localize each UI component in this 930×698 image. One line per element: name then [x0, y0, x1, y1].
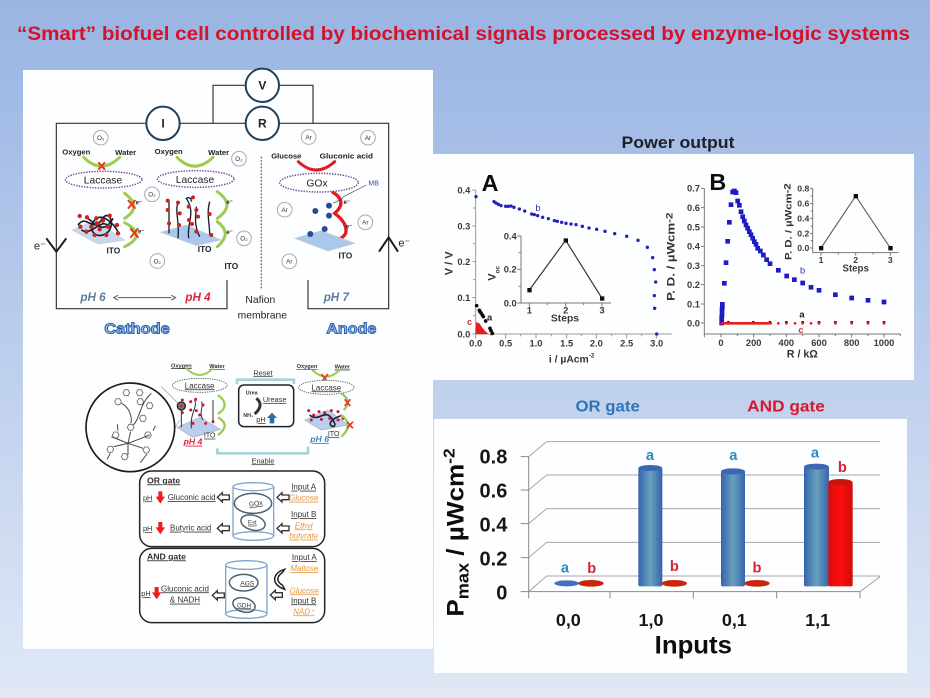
- magnified molecule: [86, 383, 180, 472]
- pH labels: pH 7: [323, 291, 349, 304]
- upper Laccase ellipses: Laccase: [185, 381, 215, 390]
- electron labels: e⁻: [344, 200, 350, 206]
- bars at inputs 0,0: [554, 580, 604, 587]
- urease box: pH: [256, 415, 266, 424]
- GOx enzyme: GOx: [249, 500, 264, 509]
- chart A x tick labels: 1.5: [560, 339, 573, 349]
- OR gate row 2: Butyric acid: [170, 524, 211, 533]
- AND gate output: [141, 584, 282, 605]
- y axis tick labels: 0.8: [480, 447, 507, 469]
- inset: open-circuit voltage: 0.2: [504, 265, 517, 275]
- upper reaction labels: Water: [209, 364, 226, 370]
- left electron arrow: e⁻: [34, 240, 46, 252]
- pH labels: pH 4: [184, 291, 211, 304]
- electrode labels: pH 6: [309, 434, 329, 444]
- series labels: c: [798, 325, 804, 335]
- ITO labels: ITO: [198, 244, 212, 254]
- chart A y tick labels: [457, 185, 471, 339]
- ITO labels: ITO: [338, 251, 353, 261]
- substrate labels: Water: [208, 148, 229, 157]
- electrode surfaces: [72, 221, 355, 251]
- upper Laccase ellipses: [172, 378, 354, 394]
- upper reaction labels: [171, 363, 351, 371]
- right electron arrow: e⁻: [398, 238, 410, 250]
- inhibited reaction crosses: [98, 162, 138, 238]
- chart B letter: B: [709, 169, 726, 195]
- Enable bracket: Enable: [252, 456, 274, 465]
- chart B: power density vs resistance: [664, 169, 901, 361]
- inset: power density: 0.0: [797, 243, 810, 253]
- meter I: [146, 107, 180, 140]
- electrode labels: [183, 431, 340, 447]
- upper reaction labels: Oxygen: [297, 364, 318, 370]
- y axis tick labels: [480, 447, 507, 604]
- blocked reaction cross: [321, 374, 328, 382]
- inset: open-circuit voltage: V: [487, 273, 499, 281]
- bars at inputs 1,0: [638, 465, 687, 587]
- electrode labels: ITO: [328, 431, 340, 438]
- chart A y tick labels: 0.1: [457, 293, 470, 303]
- chart B axis titles: R / kΩ: [787, 349, 818, 361]
- inset: power density: 0.4: [797, 213, 810, 223]
- chart A x tick labels: 0.0: [469, 339, 482, 349]
- GOx enzyme: [234, 493, 272, 513]
- enzyme names: [84, 175, 328, 189]
- upper Laccase ellipses: Laccase: [311, 383, 342, 392]
- Nafion membrane dotted line: [259, 157, 263, 290]
- AND gate output: pH: [141, 589, 151, 598]
- Reset bracket: Reset: [253, 368, 273, 377]
- x axis tick labels: 0,1: [722, 610, 747, 630]
- AND gate inputs: Maltose: [290, 564, 319, 573]
- meter I: I: [161, 117, 165, 131]
- y axis tick labels: 0.2: [480, 548, 507, 570]
- electron labels: e⁻: [138, 229, 144, 235]
- OR gate box: [140, 471, 325, 547]
- urease box: [239, 385, 294, 427]
- enzyme names: Laccase: [84, 176, 122, 187]
- argon bubbles: Ar: [282, 207, 288, 214]
- chart A y tick labels: 0.2: [457, 257, 470, 267]
- chart B y tick labels: 0.7: [687, 184, 700, 194]
- inset: open-circuit voltage: oc: [494, 265, 501, 273]
- chart B axis titles: [664, 212, 818, 361]
- MB label: MB: [368, 181, 379, 188]
- Enable bracket: [217, 447, 308, 465]
- chart B x tick labels: 800: [844, 338, 859, 348]
- AND gate inputs: Input B: [291, 596, 316, 605]
- chart A y tick labels: 0.0: [457, 329, 470, 339]
- x axis tick labels: 0,0: [556, 610, 581, 630]
- x axis tick labels: [556, 610, 830, 630]
- OR gate row 1: pH: [143, 493, 152, 502]
- extended polymer brush: [168, 197, 211, 238]
- chart B axis titles: P. D. / µWcm: [665, 238, 677, 301]
- chart B y tick labels: 0.6: [687, 203, 700, 213]
- ITO labels: ITO: [106, 246, 121, 256]
- urease box: NH₃: [243, 413, 254, 419]
- bar chart gridlines: [529, 442, 880, 592]
- inset: open-circuit voltage: 1: [527, 306, 532, 316]
- series a points: [477, 306, 492, 333]
- GDH enzyme: GDH: [237, 602, 251, 609]
- chart B axis titles: -2: [664, 212, 674, 223]
- oxygen bubbles: O₂: [154, 258, 162, 265]
- oxygen bubbles: [93, 130, 251, 268]
- Power output heading: Power output: [622, 133, 735, 152]
- bar letters a: a: [646, 448, 655, 464]
- oxygen bubbles: O₂: [97, 135, 105, 142]
- bar letters a: [561, 446, 820, 577]
- chart A axis titles: V / V: [443, 251, 455, 275]
- Est enzyme: [239, 512, 267, 533]
- chart A axis titles: i / µAcm: [549, 354, 589, 365]
- AGS enzyme: AGS: [240, 580, 255, 587]
- meter R: [246, 107, 279, 140]
- inset: power density: P. D. / µWcm: [784, 205, 794, 260]
- Est enzyme: Est: [248, 521, 257, 527]
- y axis title: max: [454, 562, 473, 599]
- logic gate schematics: [86, 363, 354, 623]
- x axis tick labels: 1,0: [638, 610, 664, 630]
- chart B x tick labels: 1000: [874, 338, 894, 348]
- series labels: a: [799, 310, 805, 320]
- inset: open-circuit voltage: 0.4: [504, 231, 517, 241]
- AND gate output: Gluconic acid: [161, 584, 209, 593]
- OR gate inputs: Ethyl: [295, 521, 313, 530]
- electrode labels: ITO: [204, 433, 216, 440]
- bar letters a: a: [811, 446, 820, 462]
- ITO labels: [106, 244, 353, 271]
- meter V: [246, 69, 279, 102]
- enzyme ellipses: [65, 171, 358, 192]
- MB label: [333, 181, 379, 203]
- maltose conversion arrow: [275, 569, 285, 589]
- electrode labels: pH 4: [183, 437, 203, 447]
- y axis title: -2: [442, 448, 459, 464]
- OR gate row 2: [143, 522, 289, 534]
- left electron arrow: [34, 238, 66, 252]
- series b points: [722, 191, 884, 323]
- AND gate heading: AND gate: [747, 399, 825, 416]
- chart A x tick labels: 0.5: [499, 339, 512, 349]
- y axis tick labels: 0: [496, 582, 507, 604]
- inset: power density: -2: [782, 183, 792, 193]
- x axis title: Inputs: [655, 631, 732, 659]
- OR gate inputs: Input B: [291, 510, 316, 519]
- argon bubbles: Ar: [365, 135, 371, 142]
- inset: power density: 3: [888, 255, 893, 265]
- series labels: [467, 203, 541, 327]
- chart A axis titles: [443, 251, 595, 365]
- AND gate cylinder: [226, 561, 267, 618]
- substrate labels: Oxygen: [62, 147, 91, 156]
- upper reaction arcs: [186, 368, 340, 377]
- pH labels: [79, 291, 349, 304]
- inset: power density: 0.6: [797, 199, 810, 209]
- chart A letter: A: [482, 170, 499, 196]
- right electron arrow: [379, 237, 410, 252]
- electron labels: e⁻: [226, 230, 233, 236]
- electron labels: e⁻: [346, 224, 352, 230]
- series a points: [728, 318, 884, 327]
- inset: power density: 0.2: [797, 228, 810, 238]
- inset: power density: [782, 183, 899, 274]
- electron labels: [136, 200, 352, 236]
- series labels: c: [467, 317, 472, 327]
- bar chart axes: [521, 457, 860, 598]
- y axis title: P: [442, 601, 469, 617]
- OR gate cylinder: [233, 483, 274, 540]
- bar letters a: a: [729, 448, 738, 464]
- inset: open-circuit voltage: 0.0: [504, 298, 517, 308]
- meter R: R: [258, 117, 267, 131]
- chart A y tick labels: 0.4: [457, 185, 471, 195]
- chart A x tick labels: [469, 339, 663, 349]
- circuit wires: [56, 85, 389, 309]
- enzyme names: Laccase: [176, 175, 214, 186]
- chart B x tick labels: 200: [746, 338, 761, 348]
- left electrode pH 4: [177, 395, 225, 437]
- right electrode pH 6: [305, 393, 353, 437]
- chart B y tick labels: [687, 184, 701, 328]
- series c points: [476, 323, 487, 334]
- substrate labels: Water: [115, 148, 136, 157]
- enzyme reaction arcs: [84, 157, 346, 247]
- series labels: a: [487, 312, 493, 322]
- substrate labels: Oxygen: [155, 147, 183, 156]
- series b points: [476, 197, 657, 334]
- bar letters b: b: [670, 559, 679, 575]
- series labels: [798, 266, 805, 335]
- oxygen bubbles: O₂: [235, 156, 243, 163]
- urease box: Urea: [246, 391, 258, 397]
- chart A x tick labels: 1.0: [530, 339, 542, 349]
- chart B y tick labels: 0.2: [687, 280, 700, 290]
- series labels: b: [800, 266, 805, 276]
- series labels: b: [535, 203, 541, 213]
- chart B x tick labels: 0: [718, 338, 724, 348]
- bar letters a: a: [561, 561, 570, 577]
- pH labels: pH 6: [79, 291, 106, 304]
- collapsed polymer brush: [78, 216, 118, 235]
- AND gate heading: AND gate: [147, 551, 186, 561]
- substrate labels: Gluconic acid: [320, 151, 373, 160]
- AND gate inputs: NAD⁺: [293, 607, 315, 616]
- upper reaction labels: Oxygen: [171, 363, 192, 369]
- oxygen bubbles: O₂: [240, 236, 248, 243]
- OR gate inputs: butyrate: [289, 532, 319, 541]
- chart A x tick labels: 2.5: [620, 339, 633, 349]
- OR gate inputs: Input A: [291, 483, 317, 492]
- mediator dots: [307, 203, 332, 237]
- bar letters b: b: [838, 460, 847, 476]
- series c points: [722, 319, 884, 327]
- OR gate heading: OR gate: [147, 475, 180, 485]
- inset: open-circuit voltage: [487, 231, 611, 325]
- chart B y tick labels: 0.0: [687, 318, 700, 328]
- chart A axis titles: -2: [589, 353, 595, 360]
- OR gate row 1: Gluconic acid: [168, 493, 216, 502]
- circuit diagram: [34, 69, 410, 338]
- bar letters b: [587, 460, 847, 577]
- y axis tick labels: 0.4: [480, 514, 507, 536]
- inset: open-circuit voltage: 3: [599, 306, 605, 316]
- panel: power output charts: [430, 154, 914, 380]
- AGS enzyme: [229, 574, 258, 591]
- chart B axes: [701, 188, 901, 337]
- inset: power density: Steps: [843, 263, 869, 274]
- inset: open-circuit voltage: Steps: [551, 314, 579, 325]
- bars at inputs 1,1: [804, 464, 853, 586]
- chart B x tick labels: 600: [811, 338, 827, 348]
- argon bubbles: Ar: [362, 220, 368, 227]
- inset: power density: 0.8: [797, 183, 810, 193]
- argon bubbles: Ar: [286, 259, 292, 266]
- AND gate inputs: Input A: [292, 553, 317, 562]
- OR gate row 1: [143, 491, 289, 504]
- oxygen bubbles: O₂: [148, 192, 156, 199]
- chart B x tick labels: 400: [779, 338, 794, 348]
- inset: open-circuit voltage: 2: [563, 306, 568, 316]
- chart B y tick labels: 0.3: [687, 261, 700, 271]
- Nafion membrane label: [238, 295, 287, 322]
- pH switch arrow: [114, 295, 176, 300]
- chart A: voltage vs current: [443, 170, 672, 365]
- substrate labels: Glucose: [271, 151, 301, 160]
- OR gate inputs: Glucose: [289, 494, 319, 503]
- enzyme names: GOx: [306, 178, 328, 189]
- Reset bracket: [237, 368, 294, 384]
- electron labels: e⁻: [136, 200, 142, 206]
- Nafion membrane label: membrane: [238, 311, 287, 322]
- argon bubbles: Ar: [305, 134, 312, 141]
- ITO labels: ITO: [224, 261, 239, 271]
- AND gate box: [140, 548, 325, 623]
- title: “Smart” biofuel cell controlled by biochemical signals processed by enzyme-logic systems: [17, 24, 910, 45]
- chart A y tick labels: 0.3: [457, 221, 470, 231]
- OR gate heading: OR gate: [575, 399, 640, 416]
- chart B y tick labels: 0.5: [687, 222, 700, 232]
- argon bubbles: [277, 130, 375, 269]
- gate headings: [575, 399, 825, 416]
- panel: bar chart of maximum power: [434, 419, 907, 673]
- inset: power density: 2: [853, 255, 858, 265]
- GDH enzyme: [231, 595, 257, 615]
- AND gate inputs: [290, 553, 320, 616]
- y axis title: / µWcm: [442, 464, 469, 563]
- AND gate inputs: Glucose: [290, 586, 320, 595]
- meter V: V: [258, 79, 266, 93]
- substrate labels: [62, 147, 373, 160]
- Cathode and Anode labels: Cathode: [104, 322, 170, 338]
- bar letters b: b: [587, 561, 596, 577]
- chart B y tick labels: 0.4: [687, 242, 701, 252]
- upper reaction labels: Water: [335, 365, 351, 371]
- bars at inputs 0,1: [721, 468, 770, 587]
- inset: power density: 1: [819, 255, 824, 265]
- Nafion membrane label: Nafion: [245, 295, 276, 306]
- bar letters b: b: [753, 561, 762, 577]
- chart A x tick labels: 2.0: [590, 339, 603, 349]
- chart B y tick labels: 0.1: [687, 299, 700, 309]
- Cathode and Anode labels: Anode: [326, 322, 376, 338]
- y axis tick labels: 0.6: [480, 480, 507, 502]
- chart B x tick labels: [718, 338, 894, 348]
- chart A x tick labels: 3.0: [650, 339, 663, 349]
- AND gate output: & NADH: [170, 596, 200, 605]
- Cathode and Anode labels: [104, 322, 376, 338]
- urease box: Urease: [263, 395, 286, 404]
- OR gate row 2: pH: [143, 524, 152, 533]
- electron labels: e⁻: [226, 200, 233, 206]
- panel: biofuel cell schematics: [23, 69, 433, 649]
- chart A axes: [472, 190, 672, 338]
- x axis tick labels: 1,1: [805, 610, 830, 630]
- OR gate inputs: [289, 483, 319, 541]
